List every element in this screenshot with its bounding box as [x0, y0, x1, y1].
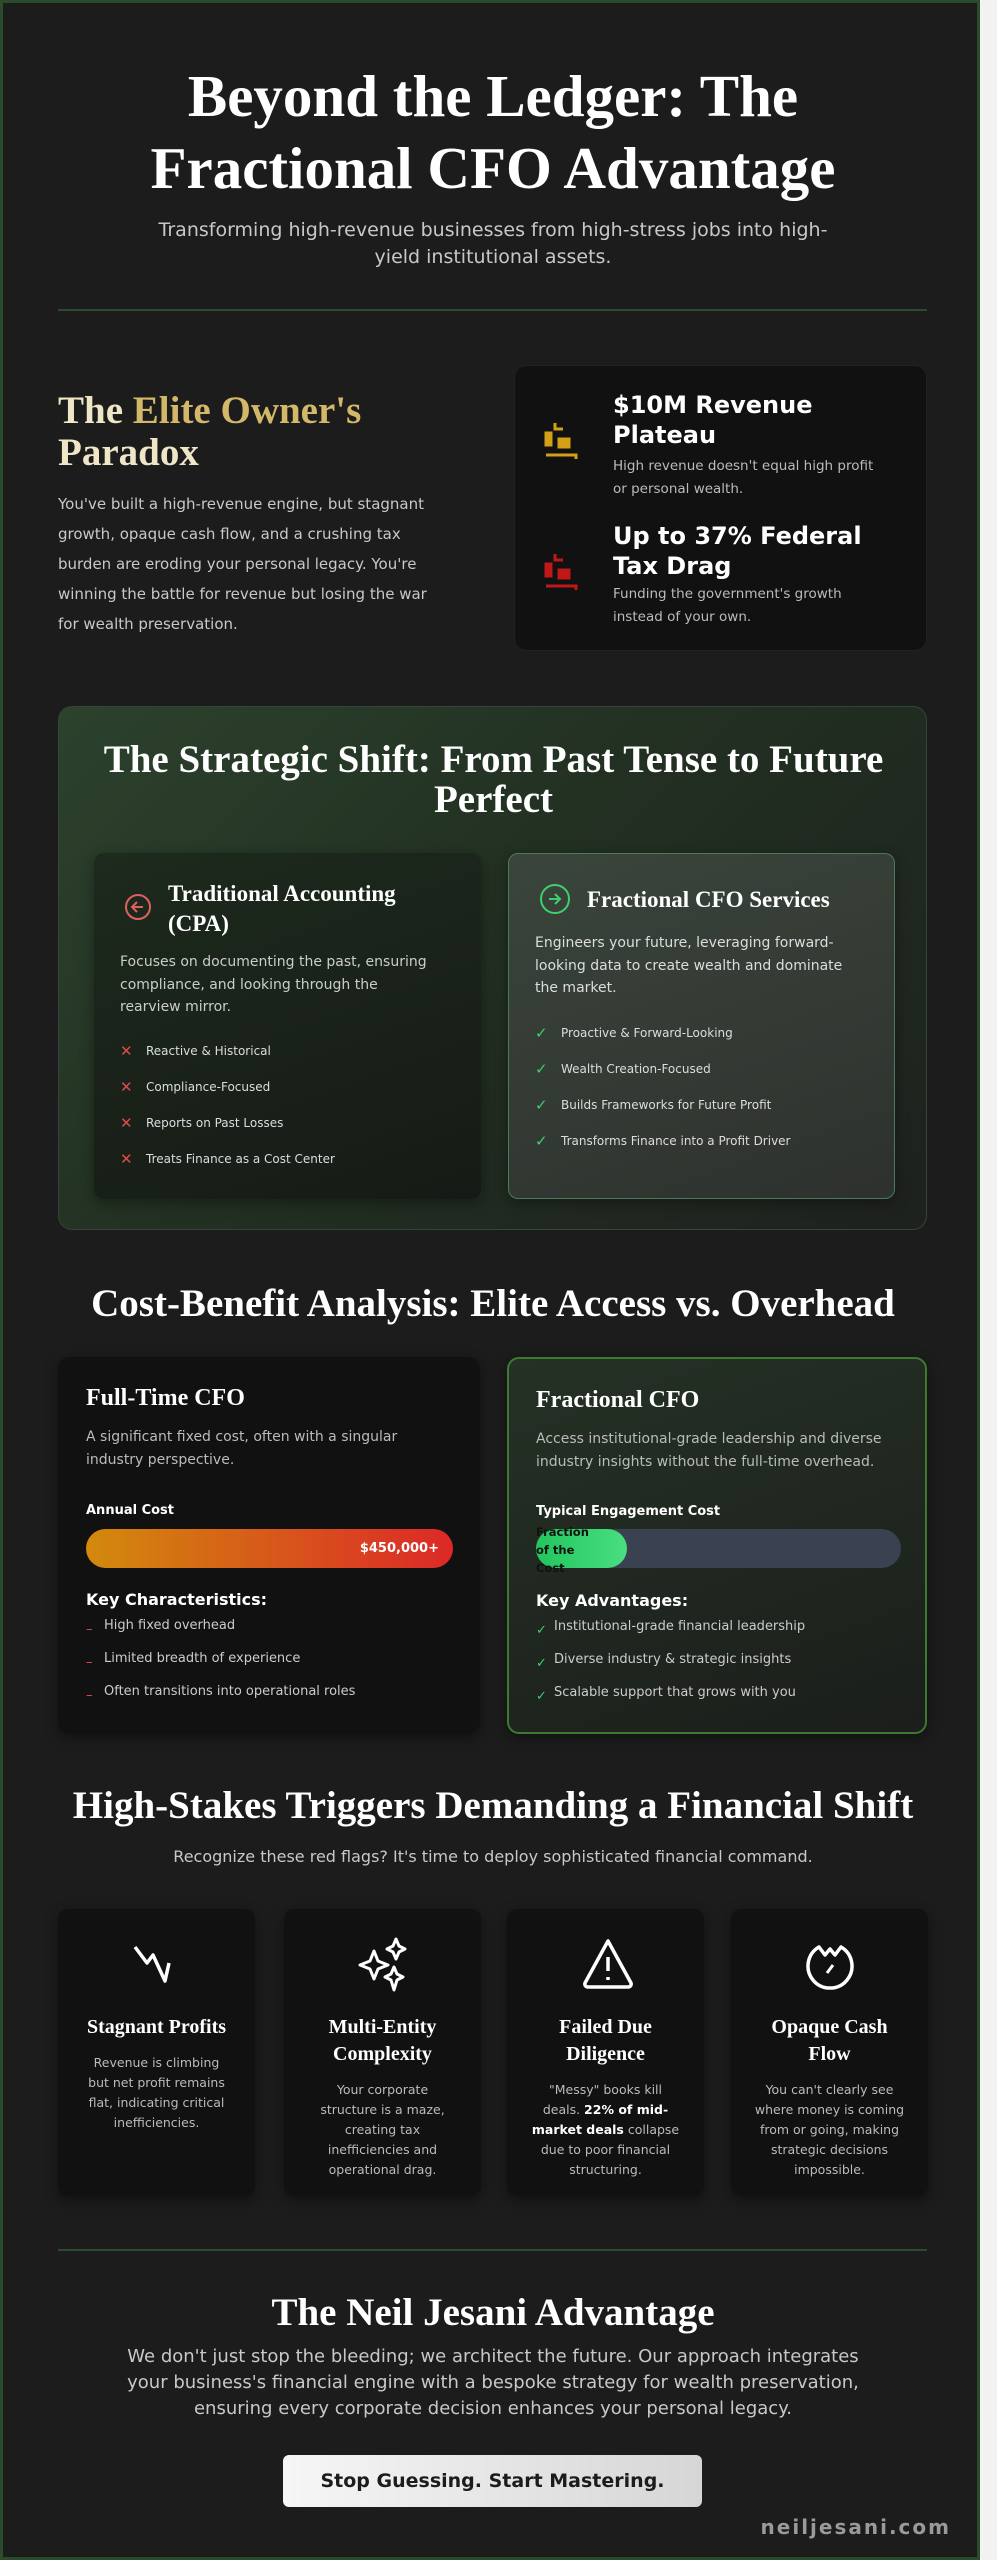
- list: advantages: ✓: [536, 1689, 547, 1704]
- card: opaque cash flow: strategic decisions: [771, 2142, 888, 2157]
- list: cpa traits: Compliance-Focused: [146, 1080, 270, 1094]
- card: opaque cash flow: where money is coming: [755, 2102, 904, 2117]
- heading: cost-benefit: Cost-Benefit Analysis: Elite Access vs. Overhead: [91, 1282, 895, 1325]
- card: failed due diligence: "Messy" books kill: [549, 2082, 662, 2097]
- list: characteristics: High fixed overhead: [104, 1618, 235, 1633]
- heading: elite owner's paradox: [58, 389, 361, 474]
- stat: revenue plateau: High revenue doesn't equal high profit: [613, 458, 873, 474]
- card: failed due diligence: market deals collapse: [532, 2122, 679, 2137]
- list: cpa traits: ✕: [120, 1078, 133, 1096]
- card: failed due diligence: deals. 22% of mid-: [543, 2102, 668, 2117]
- heading: triggers: High-Stakes Triggers Demanding a Financial Shift: [73, 1784, 913, 1827]
- paradox paragraph: You've built a high-revenue engine, but stagnant growth, opaque cash flow, and a crushing tax burden are eroding your personal legacy. You're winning the battle for revenue but losing the war for wealth preservation.: [58, 495, 427, 633]
- list: cfo traits: ✓: [535, 1060, 548, 1078]
- subtitle: triggers: Recognize these red flags? It's time to deploy sophisticated financial command.: [173, 1847, 813, 1866]
- stat: revenue plateau: or personal wealth.: [613, 481, 743, 497]
- card: stagnant profits: Revenue is climbing: [94, 2055, 219, 2070]
- list: cfo traits: Proactive & Forward-Looking: [561, 1026, 733, 1040]
- stat: tax drag: instead of your own.: [613, 609, 751, 625]
- card: opaque cash flow: You can't clearly see: [766, 2082, 893, 2097]
- text: cpa description: rearview mirror.: [120, 999, 231, 1015]
- list: cfo traits: ✓: [535, 1024, 548, 1042]
- text: cpa description: compliance, and looking through the: [120, 976, 378, 992]
- title: traditional accounting: [168, 881, 396, 936]
- label: annual cost: Annual Cost: [86, 1503, 174, 1518]
- text: closing paragraph: [127, 2346, 859, 2419]
- card: stagnant profits: but net profit remains: [88, 2075, 225, 2090]
- list: characteristics: [86, 1618, 355, 1703]
- heading: strategic shift: The Strategic Shift: From Past Tense to Future: [104, 738, 883, 781]
- text: cpa description: Focuses on documenting the past, ensuring: [120, 954, 427, 970]
- text: description: A significant fixed cost, often with a singular industry perspective.: [86, 1429, 397, 1468]
- list: characteristics: Limited breadth of experience: [104, 1651, 300, 1666]
- panel: strategic shift: [58, 706, 927, 1230]
- heading: strategic shift: Perfect: [434, 778, 553, 821]
- list: characteristics: Often transitions into operational roles: [104, 1684, 355, 1699]
- icon: forward arrow: [540, 884, 570, 914]
- list: cpa traits: Reports on Past Losses: [146, 1116, 283, 1130]
- card: stagnant profits: Stagnant Profits: [87, 2016, 226, 2038]
- card: opaque cash flow: Opaque Cash Flow: [771, 2016, 888, 2065]
- card: failed due diligence: [507, 1909, 704, 2196]
- heading: neil jesani advantage: The Neil Jesani Advantage: [271, 2291, 715, 2334]
- card: failed due diligence: Failed Due Diligence: [559, 2016, 652, 2065]
- heading: elite owner's paradox: The Elite Owner's: [58, 389, 361, 432]
- stat: revenue plateau: $10M Revenue: [613, 391, 812, 419]
- card: opaque cash flow: [731, 1909, 928, 2196]
- card: multi-entity complexity: operational drag.: [329, 2162, 436, 2177]
- card: failed due diligence: structuring.: [569, 2162, 642, 2177]
- list: cpa traits: ✕: [120, 1150, 133, 1168]
- list: cfo traits: [535, 1024, 790, 1150]
- icon: back arrow: [125, 894, 151, 920]
- panel: paradox stats: [514, 365, 927, 651]
- subtitle: yield institutional assets.: [375, 246, 611, 268]
- list: cfo traits: ✓: [535, 1096, 548, 1114]
- list: characteristics: –: [86, 1622, 92, 1637]
- stat: revenue plateau: Plateau: [613, 421, 716, 449]
- list: cfo traits: Wealth Creation-Focused: [561, 1062, 711, 1076]
- list: cpa traits: ✕: [120, 1114, 133, 1132]
- title: [150, 63, 836, 201]
- text: closing paragraph: your business's financial engine with a bespoke strategy for wealth preservation,: [127, 2372, 859, 2393]
- subtitle: Transforming high-revenue businesses from high-stress jobs into high-: [159, 219, 827, 241]
- icon: sparkles: [358, 1938, 407, 1992]
- card: traditional accounting: [94, 853, 481, 1199]
- stat: tax drag: Funding the government's growth: [613, 586, 842, 602]
- title: full-time cfo: Full-Time CFO: [86, 1385, 245, 1411]
- list: advantages: [536, 1619, 805, 1704]
- list: cfo traits: ✓: [535, 1132, 548, 1150]
- text: closing paragraph: We don't just stop the bleeding; we architect the future. Our approach integrates: [127, 2346, 859, 2367]
- text: cfo description: the market.: [535, 980, 617, 996]
- icon: timer: [806, 1945, 854, 1990]
- list: cfo traits: Transforms Finance into a Profit Driver: [561, 1134, 790, 1148]
- list: characteristics: –: [86, 1688, 92, 1703]
- card: stagnant profits: [58, 1909, 255, 2196]
- list: advantages: Scalable support that grows with you: [554, 1685, 796, 1700]
- icon: revenue plateau: [544, 423, 578, 459]
- list: advantages: ✓: [536, 1623, 547, 1638]
- bar: annual cost: $450,000+: [360, 1541, 439, 1556]
- subtitle: [158, 219, 827, 268]
- heading: strategic shift: [104, 738, 883, 821]
- list: cfo traits: Builds Frameworks for Future Profit: [561, 1098, 771, 1112]
- stat: tax drag: Up to 37% Federal: [613, 522, 862, 550]
- footer: website: neiljesani.com: [761, 2515, 951, 2539]
- card: opaque cash flow: impossible.: [794, 2162, 865, 2177]
- list: cpa traits: Treats Finance as a Cost Center: [146, 1152, 335, 1166]
- list: cpa traits: ✕: [120, 1042, 133, 1060]
- text: cfo description: Engineers your future, leveraging forward-: [535, 935, 834, 951]
- card: multi-entity complexity: [284, 1909, 481, 2196]
- card: multi-entity complexity: Your corporate: [337, 2082, 428, 2097]
- card: multi-entity complexity: Multi-Entity Complexity: [329, 2016, 436, 2065]
- title: traditional accounting: (CPA): [168, 911, 229, 936]
- stat: tax drag: [613, 522, 862, 625]
- bar: engagement cost: Fraction of the Cost: [536, 1525, 589, 1575]
- card: opaque cash flow: from or going, making: [760, 2122, 899, 2137]
- title: fractional cfo: Fractional CFO: [536, 1387, 699, 1413]
- icon: tax drag: [544, 554, 578, 590]
- list: advantages: Institutional-grade financial leadership: [554, 1619, 805, 1634]
- card: failed due diligence: due to poor financial: [541, 2142, 670, 2157]
- list: characteristics: –: [86, 1655, 92, 1670]
- card: multi-entity complexity: inefficiencies and: [328, 2142, 437, 2157]
- list: cpa traits: Reactive & Historical: [146, 1044, 271, 1058]
- icon: warning triangle: [583, 1939, 633, 1989]
- card: multi-entity complexity: structure is a maze,: [320, 2102, 445, 2117]
- heading: elite owner's paradox: Paradox: [58, 431, 199, 474]
- heading: key advantages: Key Advantages:: [536, 1591, 688, 1610]
- title: Beyond the Ledger: The: [188, 63, 798, 129]
- icon: zigzag: [134, 1946, 171, 1983]
- stat: revenue plateau: [613, 391, 873, 497]
- card: full-time cfo: [58, 1357, 480, 1734]
- card: fractional cfo: [507, 1357, 927, 1734]
- list: cpa traits: [120, 1042, 335, 1168]
- heading: key characteristics: Key Characteristics:: [86, 1590, 267, 1609]
- label: engagement cost: Typical Engagement Cost: [536, 1504, 720, 1519]
- title: traditional accounting: Traditional Accounting: [168, 881, 396, 906]
- button: cta: Stop Guessing. Start Mastering.: [320, 2470, 665, 2492]
- bar: annual cost: [86, 1529, 453, 1568]
- text: closing paragraph: ensuring every corporate decision enhances your personal legacy.: [194, 2398, 792, 2419]
- text: description: Access institutional-grade leadership and diverse industry insights without the full-time overhead.: [536, 1431, 882, 1470]
- title: Fractional CFO Advantage: [150, 135, 836, 201]
- card: fractional cfo services: [508, 853, 895, 1199]
- title: fractional cfo services: Fractional CFO Services: [587, 887, 830, 912]
- text: cfo description: looking data to create wealth and dominate: [535, 958, 842, 974]
- card: multi-entity complexity: creating tax: [345, 2122, 420, 2137]
- list: advantages: ✓: [536, 1656, 547, 1671]
- stat: tax drag: Tax Drag: [613, 552, 731, 580]
- list: advantages: Diverse industry & strategic insights: [554, 1652, 791, 1667]
- card: stagnant profits: inefficiencies.: [114, 2115, 199, 2130]
- bar: engagement cost: [536, 1529, 901, 1568]
- button: cta: [283, 2455, 702, 2507]
- card: stagnant profits: flat, indicating critical: [89, 2095, 224, 2110]
- text: cpa description: [120, 954, 427, 1015]
- text: cfo description: [535, 935, 842, 996]
